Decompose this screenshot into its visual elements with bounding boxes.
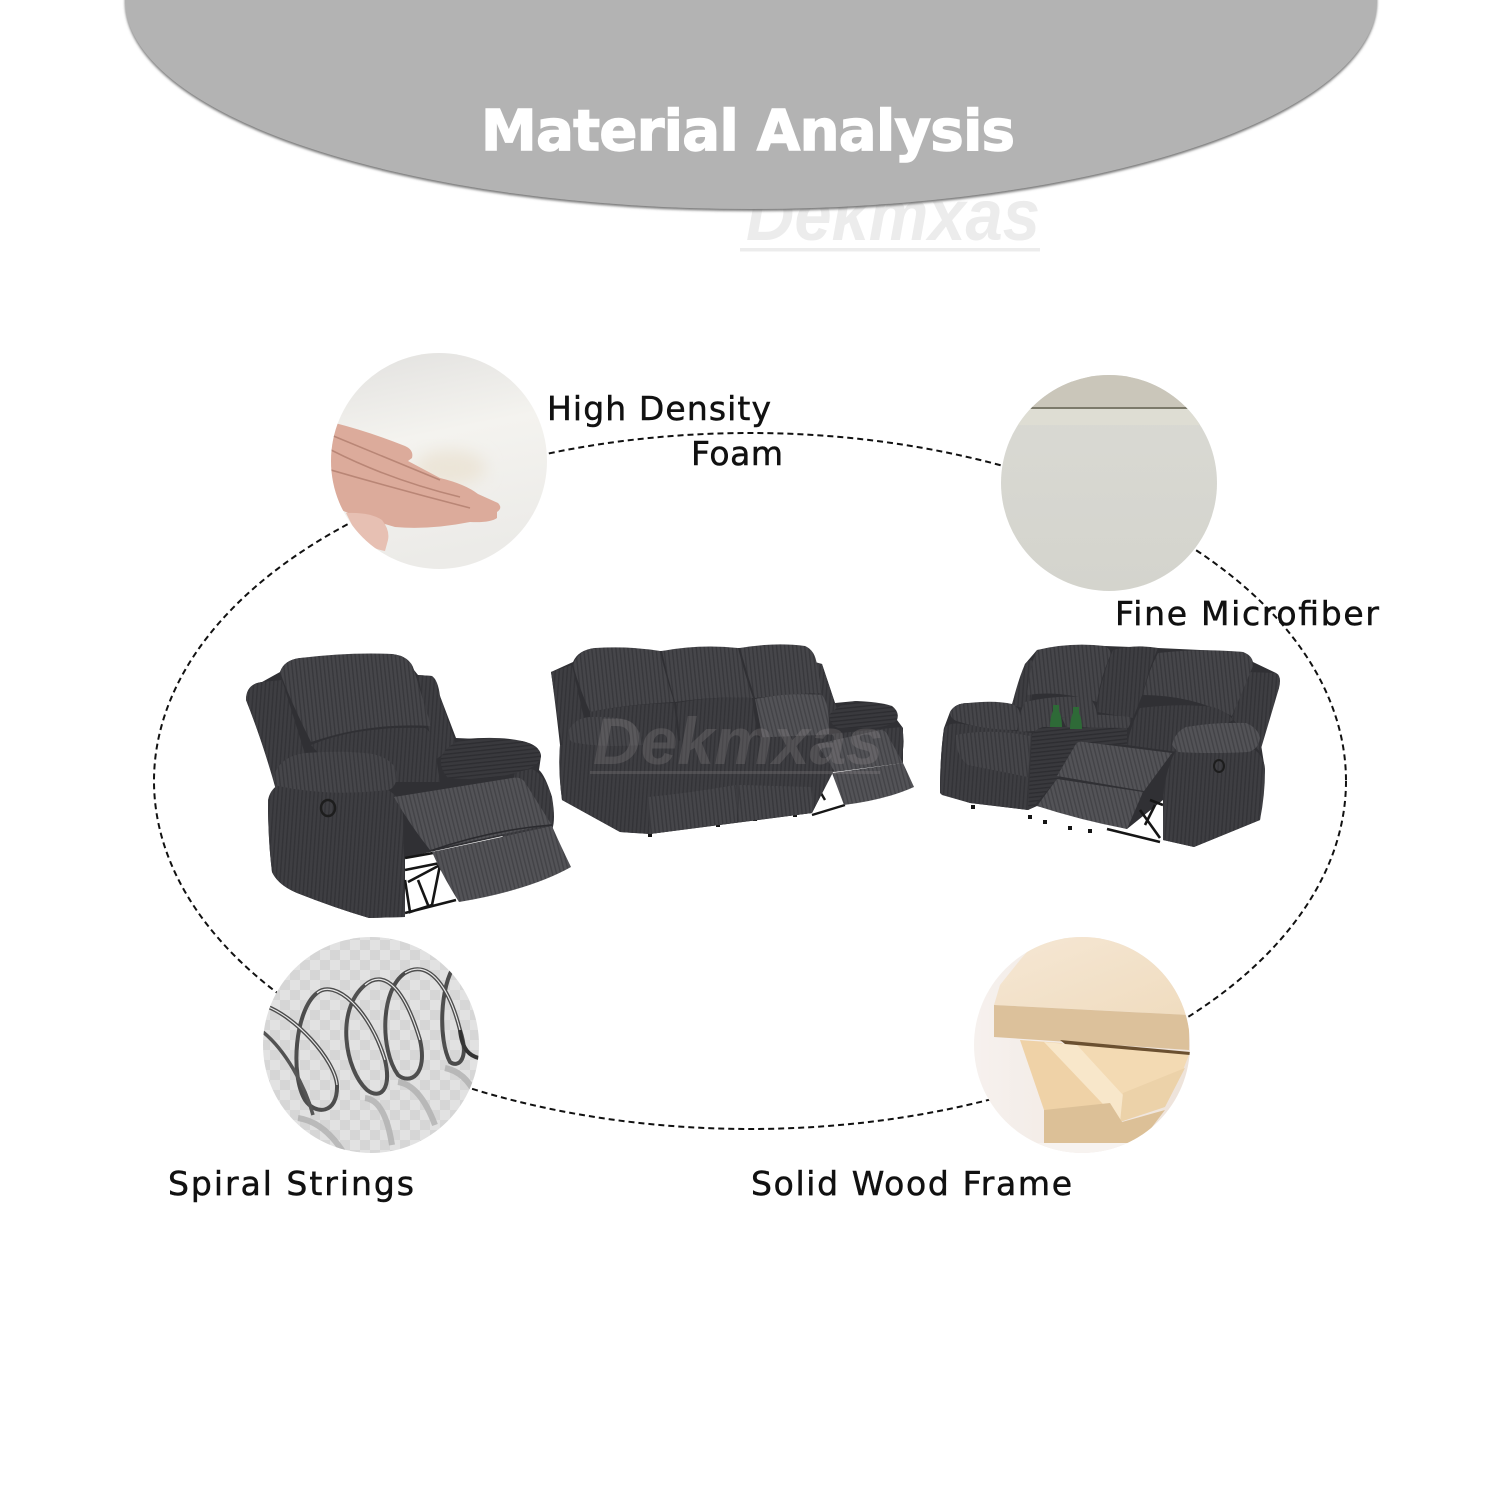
near side panel: [268, 785, 405, 918]
console lid: [1062, 715, 1131, 728]
label: High Density Foam: [547, 389, 783, 473]
near arm: [274, 752, 397, 793]
back cushion: [311, 728, 440, 782]
far side panel: [500, 769, 554, 850]
footrest upper: [817, 730, 903, 772]
label: Fine Microfiber: Fine Microfiber: [1115, 594, 1379, 633]
footrest lower: [432, 826, 571, 902]
wings: [551, 665, 590, 745]
recliner mechanism: [1107, 800, 1163, 842]
watermark: top Dekmxas: Dekmxas: [746, 176, 1040, 256]
title: Material Analysis: [481, 99, 1015, 164]
recliner mechanism: [405, 850, 456, 913]
lower panels: [648, 785, 737, 834]
icon: hand pressing foam: [331, 423, 500, 551]
right arm: [829, 701, 898, 728]
label: Spiral Strings: Spiral Strings: [168, 1164, 414, 1203]
spring coils: [263, 965, 464, 1110]
left arm: [568, 717, 643, 746]
footrest lower: [1037, 779, 1143, 829]
silhouette: [940, 646, 1279, 847]
seat cushions: [644, 742, 738, 795]
right back cushion: [1143, 650, 1253, 716]
lower left back: [1018, 697, 1097, 732]
centre back cushion: [1097, 646, 1158, 718]
feet: [973, 805, 1090, 833]
back wings: [246, 680, 310, 790]
product: loveseat with console: [940, 645, 1280, 847]
footrest lower: [832, 763, 914, 805]
label: High Density Foam: High Density: [547, 389, 771, 428]
product: armchair recliner: [246, 654, 571, 918]
lower back cushions: [590, 703, 680, 760]
left arm: [950, 702, 1020, 730]
far arm: [441, 738, 541, 779]
product: three-seat reclining sofa: [551, 644, 914, 837]
dashed ellipse connector: [154, 433, 1346, 1129]
label: Solid Wood Frame: Solid Wood Frame: [751, 1164, 1072, 1203]
console: [1028, 727, 1127, 810]
recliner mechanism: [812, 772, 845, 815]
left back cushion: [1027, 645, 1110, 702]
watermark: sofa Dekmxas: Dekmxas: [593, 704, 883, 778]
left body: [940, 724, 1032, 810]
footrest upper: [394, 778, 551, 850]
lower right back: [1127, 705, 1233, 752]
right arm: [1172, 723, 1260, 753]
release handle: [1214, 760, 1224, 772]
silhouette: [551, 646, 903, 834]
back cushions: [573, 647, 674, 712]
body: [559, 727, 904, 834]
seam: [430, 825, 552, 851]
panel: high density foam swatch: [331, 353, 547, 569]
icon: two green bottles: [1050, 705, 1082, 729]
panel: spiral strings swatch: [263, 937, 479, 1155]
silhouette: [246, 654, 553, 918]
right wing: [1232, 672, 1280, 752]
panel: solid wood frame swatch: [974, 937, 1190, 1155]
head cushion: [280, 654, 431, 742]
footrest upper: [1057, 742, 1172, 791]
panel: fine microfiber swatch: [1001, 375, 1217, 591]
release handle: [321, 800, 335, 816]
header: grey ellipse banner: [125, 0, 1377, 209]
left wing: [1012, 660, 1036, 710]
feet: [650, 812, 795, 837]
right side panel: [1163, 750, 1265, 847]
shadows of the spring: [298, 1068, 476, 1155]
label: High Density Foam: Foam: [691, 434, 783, 473]
left seat cushion: [956, 732, 1030, 777]
